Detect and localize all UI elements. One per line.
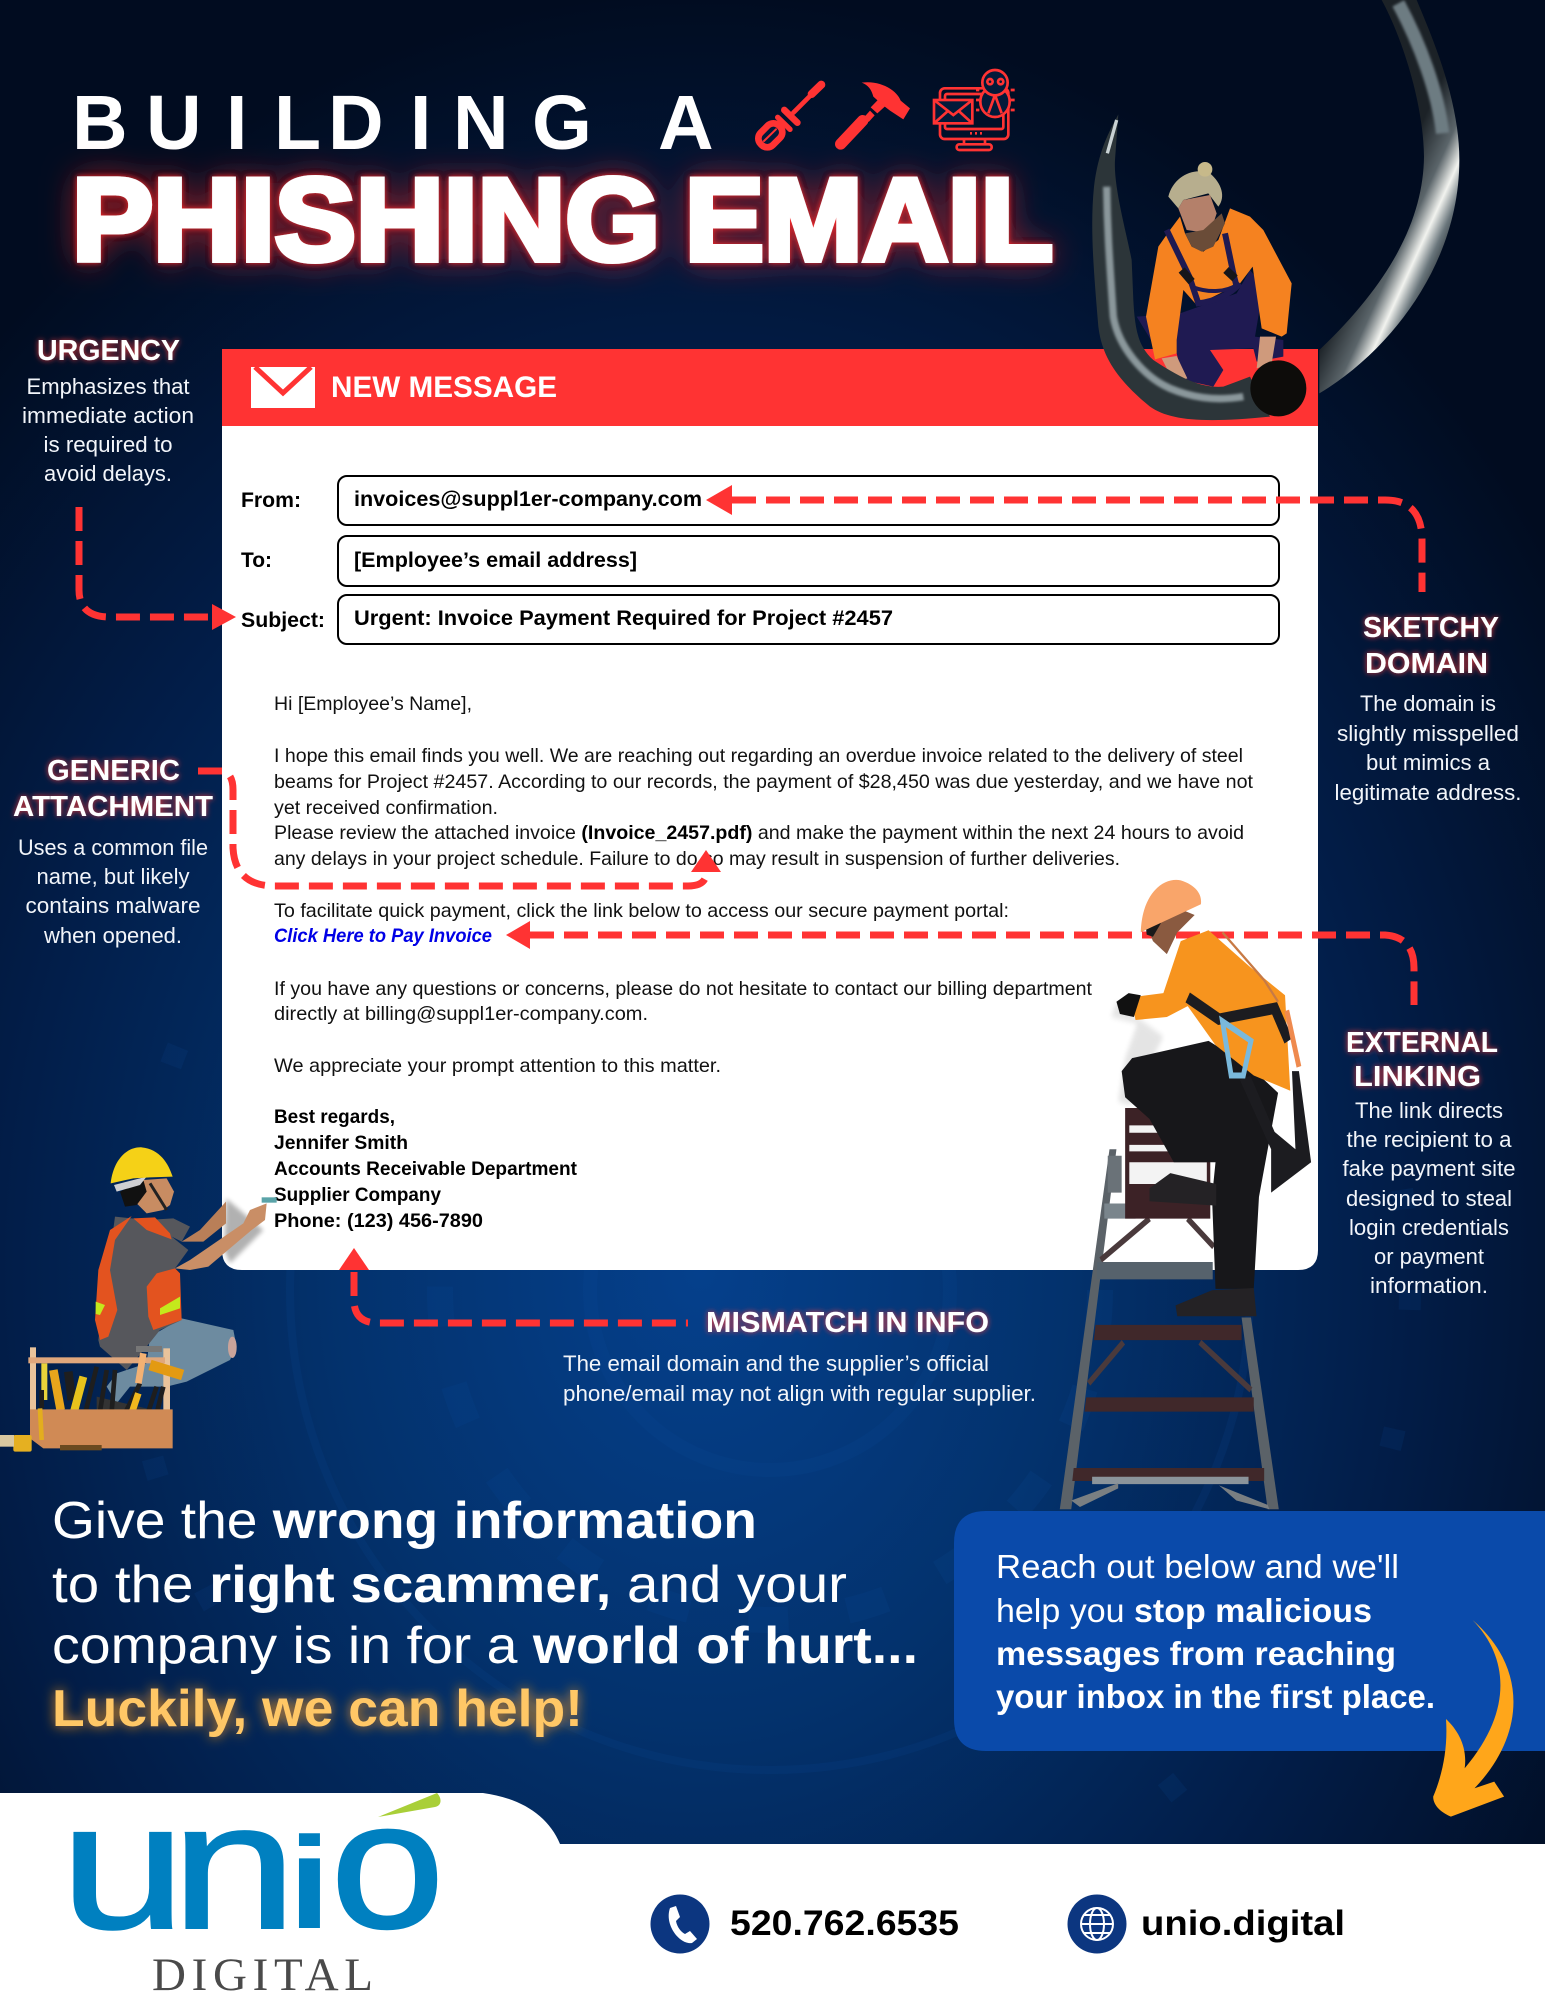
callout: generic attachment: ATTACHMENT (13, 791, 213, 823)
email body text: Jennifer Smith (274, 1132, 408, 1154)
card header bar (222, 349, 1318, 426)
callout: external linking: information. (1370, 1273, 1488, 1298)
tool tip (262, 1197, 277, 1203)
email body text (274, 693, 1254, 1232)
closing message (52, 1492, 918, 1738)
worker with toolbox (0, 1147, 277, 1452)
vest reflectors (96, 1297, 180, 1315)
front arm and hand (175, 1203, 267, 1270)
callout: external linking: EXTERNAL (1346, 1027, 1498, 1059)
email body text: Click Here to Pay Invoice (274, 925, 492, 947)
email body text: beams for Project #2457. According to our records, the payment of $28,450 was due yesterday, and we have not (274, 771, 1254, 793)
email body text: any delays in your project schedule. Failure to do so may result in suspension of further deliveries. (274, 848, 1120, 870)
closing message: Give the wrong information (52, 1492, 757, 1550)
hair (1168, 171, 1222, 208)
callout: sketchy domain: The domain is (1360, 691, 1496, 716)
callout: generic attachment: Uses a common file (18, 835, 208, 860)
logo wordmark: u (60, 1766, 186, 1967)
overalls (1137, 270, 1283, 387)
face (1146, 906, 1195, 954)
panel: call to action: help you stop malicious (996, 1592, 1372, 1629)
toolbox (0, 1346, 183, 1452)
callout: urgency: Emphasizes that (26, 374, 190, 399)
to field: To: (241, 549, 272, 572)
icon: hammer (841, 82, 910, 144)
website: unio.digital (1141, 1904, 1345, 1943)
callout: external linking: login credentials (1349, 1215, 1509, 1240)
arrow: external linking (506, 921, 1414, 1005)
callout: external linking: the recipient to a (1346, 1127, 1512, 1152)
from field (241, 476, 1279, 525)
callout: external linking: designed to steal (1346, 1186, 1512, 1211)
email body text: If you have any questions or concerns, please do not hesitate to contact our billing department (274, 978, 1093, 1000)
email body text: I hope this email finds you well. We are reaching out regarding an overdue invoice related to the delivery of steel (274, 745, 1243, 767)
hard hat (1141, 880, 1201, 932)
callout: external linking: or payment (1374, 1244, 1484, 1269)
email body text: directly at billing@suppl1er-company.com. (274, 1003, 648, 1025)
panel: call to action: messages from reaching (996, 1635, 1396, 1672)
shirt (1146, 208, 1292, 359)
panel: call to action: your inbox in the first place. (996, 1678, 1435, 1715)
title (72, 80, 1053, 285)
title line: phishing email (72, 154, 1053, 285)
arrow: urgency (79, 507, 236, 630)
subject field: Subject: (241, 609, 325, 632)
panel: call to action (954, 1511, 1545, 1751)
callout: external linking: fake payment site (1342, 1156, 1516, 1181)
panel: call to action: Reach out below and we'll (996, 1548, 1399, 1585)
icon: envelope (251, 367, 315, 408)
callout: sketchy domain: SKETCHY (1363, 612, 1499, 644)
arrow: sketchy domain (706, 485, 1422, 592)
shirt (98, 1217, 190, 1370)
face (135, 1178, 174, 1213)
closing message: Luckily, we can help! (52, 1680, 583, 1738)
callout: sketchy domain: slightly misspelled (1337, 721, 1519, 746)
arrow: mismatch in info (339, 1248, 688, 1323)
email body text: We appreciate your prompt attention to this matter. (274, 1055, 721, 1077)
callout: mismatch in info: MISMATCH IN INFO (706, 1307, 989, 1339)
from field: From: (241, 489, 301, 512)
hands (1162, 337, 1276, 383)
callout: sketchy domain (1334, 612, 1522, 805)
email body text: Please review the attached invoice (Invoice_2457.pdf) and make the payment within the next 24 hours to avoid (274, 822, 1244, 844)
worker on ladder (1060, 880, 1311, 1509)
callout: generic attachment: name, but likely (36, 864, 190, 889)
trousers (1122, 1041, 1278, 1289)
closing message: company is in for a world of hurt... (52, 1617, 918, 1675)
email body text: Best regards, (274, 1106, 395, 1128)
callout: mismatch in info (563, 1307, 1036, 1406)
to field: [Employee’s email address] (354, 549, 637, 572)
hook front with point (1092, 114, 1306, 420)
face (1178, 195, 1217, 233)
callout: mismatch in info: The email domain and the supplier’s official (563, 1351, 989, 1376)
beard (1185, 213, 1225, 252)
email body text: To facilitate quick payment, click the link below to access our secure payment portal: (274, 900, 1009, 922)
chin strap (150, 1183, 167, 1210)
logo leaf accent (378, 1793, 441, 1817)
jeans (107, 1318, 237, 1403)
hair (120, 1180, 147, 1207)
header title: NEW MESSAGE (331, 371, 557, 404)
boots (1149, 1173, 1257, 1316)
callout: generic attachment: contains malware (26, 893, 200, 918)
email body text: Phone: (123) 456-7890 (274, 1210, 483, 1232)
title line: phishing email: EMAIL (685, 154, 1053, 285)
soft shadow on card (224, 1198, 263, 1263)
harness (1188, 932, 1311, 1193)
arrow: generic attachment (198, 771, 721, 886)
to field (241, 536, 1279, 586)
subject field: Urgent: Invoice Payment Required for Project #2457 (354, 607, 893, 630)
callout: external linking: The link directs (1355, 1098, 1503, 1123)
overall straps and bib (1167, 230, 1240, 303)
arrow: orange swoosh (1433, 1620, 1513, 1817)
callout: sketchy domain: legitimate address. (1334, 780, 1522, 805)
callout: external linking: LINKING (1354, 1061, 1481, 1093)
logo wordmark: i (287, 1812, 332, 1955)
icon: email monitor with skull (934, 70, 1015, 150)
back arm (182, 1202, 226, 1242)
email body text: Hi [Employee’s Name], (274, 693, 472, 715)
callout: urgency: avoid delays. (44, 461, 172, 486)
panel: email card (222, 349, 1318, 1270)
callout: urgency: URGENCY (37, 335, 180, 367)
email body text: Supplier Company (274, 1184, 441, 1206)
footer (0, 1765, 1545, 1999)
logo wordmark: n (171, 1766, 297, 1967)
email body text: Accounts Receivable Department (274, 1158, 577, 1180)
hair bun (1198, 162, 1212, 177)
card body (222, 349, 1318, 1270)
callout: urgency (22, 335, 194, 486)
callout: mismatch in info: phone/email may not align with regular supplier. (563, 1381, 1036, 1406)
icon: phone (650, 1894, 710, 1954)
hard hat (111, 1147, 173, 1183)
logo wordmark: o (331, 1765, 444, 1966)
from field: invoices@suppl1er-company.com (354, 488, 702, 511)
callout: urgency: immediate action (22, 403, 194, 428)
glove (1116, 993, 1141, 1017)
logo wordmark (60, 1765, 444, 1967)
title line: phishing email: PHISHING (72, 154, 660, 285)
footer white band (0, 1793, 1545, 1999)
soft shadow on card (1111, 1002, 1163, 1106)
helmet liner (114, 1177, 147, 1192)
subject field (241, 595, 1279, 644)
callout: sketchy domain: but mimics a (1366, 750, 1491, 775)
title line: building a: BUILDING A (72, 80, 714, 166)
icon: globe (1068, 1894, 1126, 1954)
callout: external linking (1342, 1027, 1516, 1298)
hook shaft behind the card (1319, 0, 1459, 393)
shirt (1130, 930, 1290, 1091)
callout: generic attachment (13, 755, 213, 948)
sunglasses (1146, 915, 1163, 937)
callout: generic attachment: when opened. (43, 923, 182, 948)
callout: generic attachment: GENERIC (47, 755, 180, 787)
closing message: to the right scammer, and your (52, 1556, 847, 1614)
callout: sketchy domain: DOMAIN (1365, 648, 1488, 680)
callout: urgency: is required to (44, 432, 172, 457)
safety vest (95, 1216, 182, 1340)
email body text: yet received confirmation. (274, 797, 498, 819)
ladder (1060, 1108, 1279, 1509)
knee patch (228, 1337, 237, 1358)
worker on the hook (1137, 162, 1292, 387)
phone number: 520.762.6535 (730, 1904, 959, 1943)
icon: screwdriver (755, 85, 821, 151)
logo (60, 1765, 444, 1999)
